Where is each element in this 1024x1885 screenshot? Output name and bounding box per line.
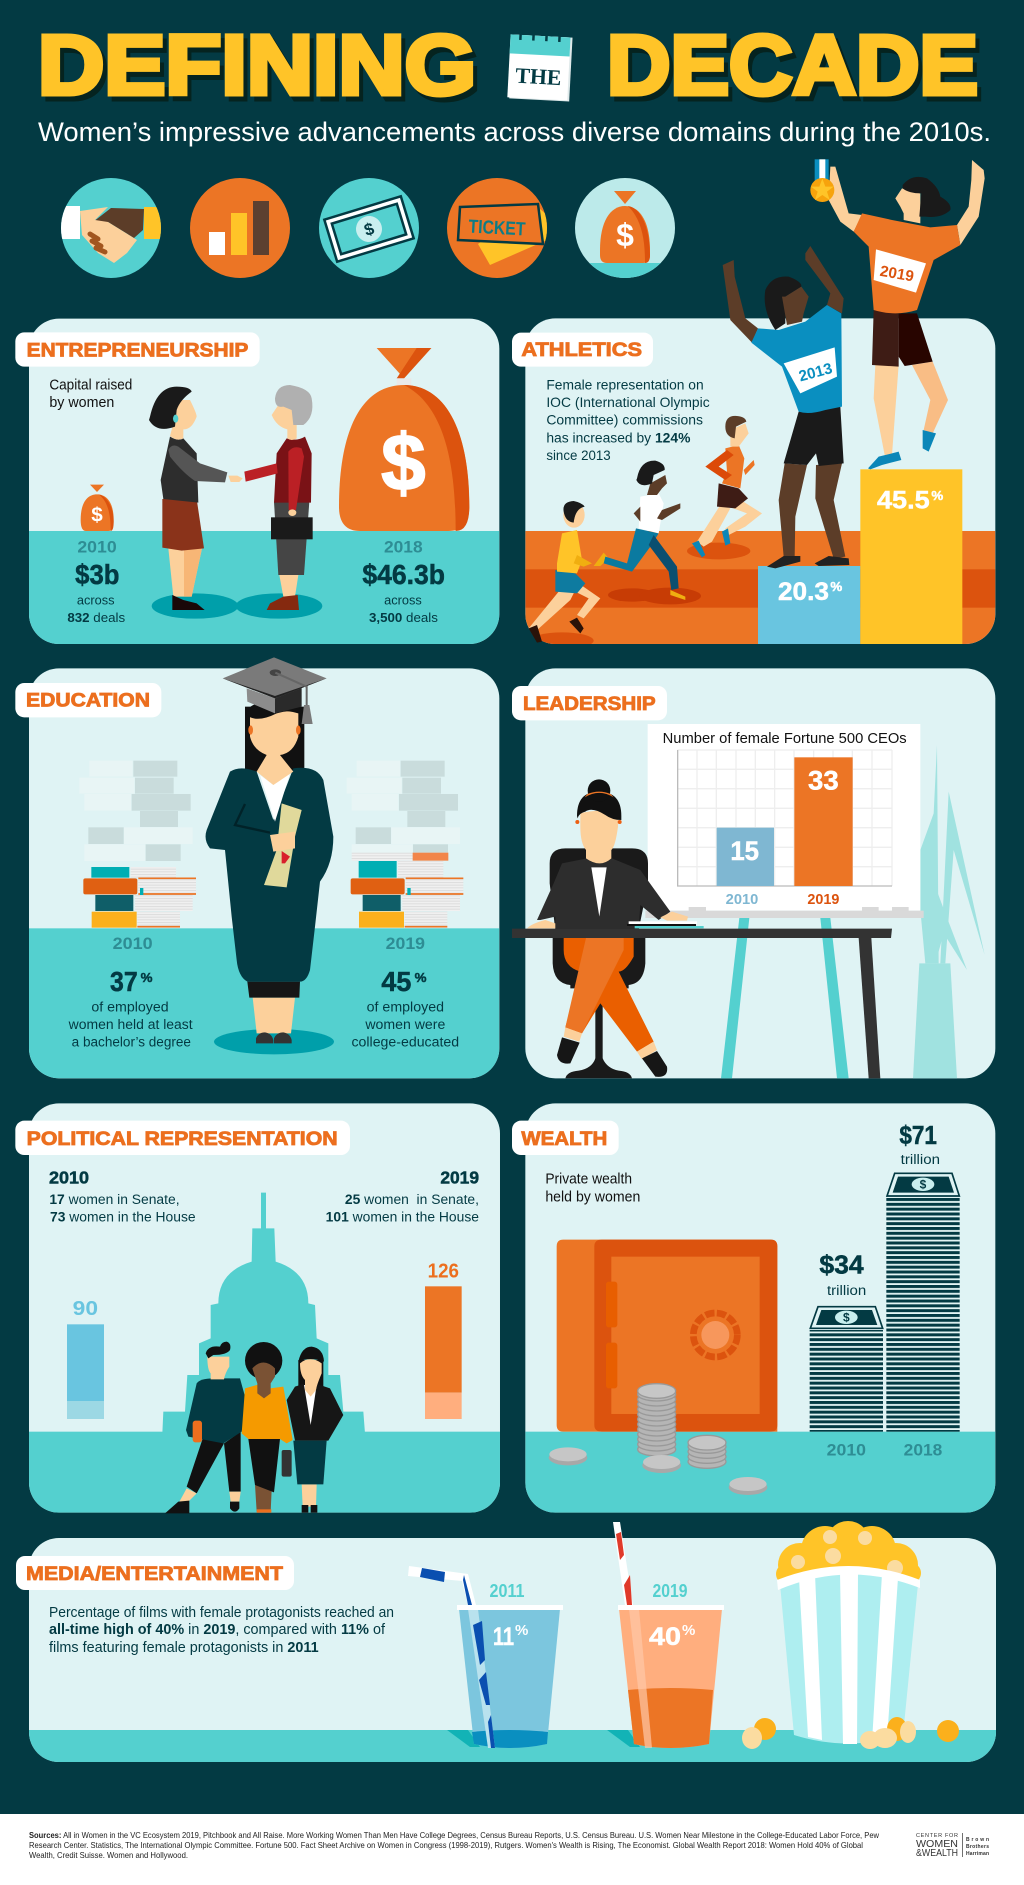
cup: 2011: % (515, 1622, 528, 1639)
stat: 45.5%: % (931, 488, 943, 503)
icon: coins (549, 1384, 767, 1495)
logo: center for women and wealth: &WEALTH (916, 1848, 958, 1859)
text: 2010 congress (49, 1167, 196, 1225)
sources text: Research Center. Statistics, The International Olympic Committee. Fortune 500. Fact Sheet Archive on Women in Congress (1998-2019), Rutgers. Women's Wealth is Rising, The Economist. Global Wealth Report 2018: Women Hold 40% of Global (29, 1840, 863, 1850)
stat: 45.5%: 45.5 (877, 487, 930, 515)
stat: 20.3%: 20.3 (778, 578, 829, 606)
stat: 2010 capital: 2010 (77, 537, 117, 556)
heading: athletics: ATHLETICS (521, 340, 642, 361)
cup: 2011: 2011 (490, 1581, 524, 1601)
panel: entrepreneurship (15, 319, 499, 644)
text: IOC representation: since 2013 (546, 447, 611, 463)
text: IOC representation: Committee) commissions (546, 412, 703, 428)
stat: 2010 education: % (141, 970, 153, 985)
text: 2010 congress: 73 women in the House (50, 1209, 196, 1225)
logo: center for women and wealth: WOMEN (916, 1839, 958, 1850)
text: capital raised (49, 377, 132, 411)
icon: small money bag (81, 485, 114, 531)
text: 2019 congress: 101 women in the House (326, 1209, 479, 1225)
logo: center for women and wealth: CENTER FOR (916, 1833, 958, 1839)
icon: calendar page with THE (507, 29, 573, 102)
heading: political representation (15, 1121, 350, 1155)
bar chart: female Fortune 500 CEOs: 2019 (807, 892, 839, 908)
figure: runner in white (594, 461, 701, 604)
text: 2010 congress: 17 women in Senate, (49, 1191, 180, 1207)
heading: wealth (512, 1121, 619, 1155)
stat: 2019 education: women were (364, 1016, 446, 1032)
icon: calendar page with THE: THE (515, 63, 562, 90)
cup: 2019 (607, 1522, 724, 1748)
stat: 2019 education: % (415, 970, 427, 985)
figure: athlete 2013 (723, 246, 849, 568)
books: 2019 stack (347, 761, 463, 928)
text: private wealth (545, 1172, 640, 1205)
bar chart: female Fortune 500 CEOs: 2010 (726, 892, 758, 908)
heading: wealth: WEALTH (521, 1129, 607, 1150)
text: film protagonists: Percentage of films with female protagonists reached an (49, 1605, 394, 1621)
figure: athlete 2013: 2013 (797, 360, 834, 385)
panel: education (15, 657, 499, 1078)
sources text (29, 1830, 880, 1860)
heading: athletics (512, 333, 653, 367)
title: DECADE (607, 18, 978, 112)
stat: 2019 education (351, 934, 459, 1050)
panel: wealth (512, 1103, 995, 1513)
stat: 2010 education: of employed (91, 998, 169, 1014)
year labels: wealth (827, 1441, 942, 1460)
text: private wealth: Private wealth (545, 1172, 632, 1188)
text: IOC representation: Female representation on (546, 376, 704, 392)
figure: two women shaking hands (149, 385, 322, 619)
bar chart: female Fortune 500 CEOs: Number of female Fortune 500 CEOs (663, 731, 907, 747)
title: DEFINING (38, 18, 476, 112)
title (38, 18, 978, 112)
subtitle: Women’s impressive advancements across diverse domains during the 2010s. (38, 117, 991, 147)
sources text: Wealth, Credit Suisse. Women and Hollywood. (29, 1850, 188, 1860)
logo: center for women and wealth (916, 1833, 989, 1859)
money stack: 2018: trillion (901, 1152, 940, 1167)
figure: runner in yellow (529, 501, 600, 643)
capitol building (162, 1193, 365, 1433)
logo: center for women and wealth: Brown (966, 1837, 989, 1843)
bar: 126 women 2019 (425, 1261, 462, 1419)
stat: 2010 capital (67, 537, 125, 625)
icon: bar chart (190, 178, 290, 278)
icon: money bag (575, 178, 675, 278)
easel legs (721, 918, 849, 1078)
money stack: 2010: $ (843, 1311, 850, 1325)
heading: education (15, 683, 161, 717)
cup: 2011: 11 (493, 1623, 514, 1651)
stat: 2018 capital: 2018 (384, 537, 423, 556)
plant (913, 745, 985, 1078)
money stack: 2018: $71 (899, 1120, 937, 1150)
sources text: Sources: All in Women in the VC Ecosystem 2019, Pitchbook and All Raise. More Working Women Than Men Have College Degrees, Census Bureau Reports, U.S. Census Bureau. U.S. Women Near Milestone in the College-Educated Labor Force, Pew (29, 1830, 880, 1840)
stat: 20.3%: % (830, 579, 842, 594)
text: film protagonists: films featuring female protagonists in 2011 (49, 1640, 319, 1656)
heading: political representation: POLITICAL REPRESENTATION (27, 1129, 338, 1150)
stat: 2019 education: 2019 (386, 934, 425, 953)
books: 2010 stack (79, 761, 196, 928)
figure: athlete 2019 with medal (810, 159, 985, 469)
money stack: 2018: $ (920, 1178, 927, 1192)
stat: 2010 education: 2010 (113, 934, 153, 953)
bar chart: female Fortune 500 CEOs: 15 (730, 836, 759, 866)
bar chart: female Fortune 500 CEOs (645, 724, 924, 918)
icon: safe (557, 1240, 777, 1432)
stat: 2010 capital: 832 deals (67, 610, 125, 625)
cup: 2019: 2019 (652, 1581, 688, 1601)
text: IOC representation (546, 376, 710, 463)
year labels: wealth: 2018 (904, 1441, 942, 1460)
icon: money bag: $ (616, 217, 634, 253)
cup: 2019: % (682, 1622, 695, 1639)
stat: 2018 capital: across (384, 592, 422, 607)
text: private wealth: held by women (545, 1189, 640, 1205)
icon: small money bag: $ (91, 503, 103, 526)
text: capital raised: by women (49, 395, 114, 411)
stat: 2018 capital: 3,500 deals (369, 610, 438, 625)
figure: three women (165, 1342, 343, 1513)
icon: ticket (447, 178, 547, 278)
stat: 2019 education: college-educated (351, 1034, 459, 1050)
panel: leadership (512, 668, 995, 1078)
popcorn kernels (742, 1717, 959, 1749)
icon: banknote: $ (362, 219, 377, 240)
figure: runner in orange (687, 416, 762, 559)
text: 2019 congress: 2019 (440, 1167, 479, 1187)
text: IOC representation: IOC (International Olympic (546, 394, 710, 410)
stat: 2010 education: 37 (110, 966, 138, 997)
icon: ticket: TICKET (468, 217, 526, 240)
bar: 90 women 2010: 90 (73, 1298, 98, 1320)
year labels: wealth: 2010 (827, 1441, 866, 1460)
heading: entrepreneurship (15, 332, 260, 367)
cup: 2019: 40 (649, 1623, 681, 1651)
money stack: 2010: trillion (827, 1283, 866, 1298)
text: 2019 congress: 25 women in Senate, (345, 1191, 479, 1207)
figure: businesswoman at desk (527, 779, 688, 1078)
cup: 2011 (408, 1566, 563, 1748)
text: capital raised: Capital raised (49, 377, 132, 393)
heading: media/entertainment: MEDIA/ENTERTAINMENT (26, 1563, 283, 1585)
stat: 2010 capital: $3b (75, 559, 119, 590)
stat: 2019 education: 45 (381, 966, 411, 997)
stat: 2010 capital: across (77, 592, 115, 607)
heading: media/entertainment (16, 1556, 294, 1590)
text: 2019 congress (326, 1167, 479, 1225)
stat: 2010 education: women held at least (68, 1016, 193, 1032)
footer band (0, 1814, 1024, 1885)
logo: center for women and wealth: Brothers (966, 1844, 989, 1850)
panel: athletics (512, 159, 995, 649)
popcorn bucket (776, 1521, 921, 1744)
icon: large money bag (339, 348, 469, 531)
figure: athlete 2019 with medal: 2019 (879, 263, 915, 285)
stat: 2018 capital: $46.3b (362, 559, 445, 590)
money stack: 2010 (810, 1249, 883, 1432)
icon: large money bag: $ (381, 418, 426, 507)
icon: handshake (61, 178, 161, 278)
stat: 2010 education (68, 934, 193, 1050)
logo: center for women and wealth: Harriman (966, 1851, 989, 1857)
bar: 126 women 2019: 126 (428, 1261, 459, 1283)
text: IOC representation: has increased by 124% (546, 429, 690, 445)
heading: leadership: LEADERSHIP (523, 694, 656, 715)
icon: banknote (319, 178, 419, 278)
bar: 90 women 2010 (67, 1298, 104, 1419)
heading: entrepreneurship: ENTREPRENEURSHIP (27, 341, 248, 362)
stat: 2019 education: of employed (367, 998, 444, 1014)
text: film protagonists (49, 1605, 394, 1656)
stat: 2010 education: a bachelor’s degree (72, 1034, 191, 1050)
stat: 2018 capital (362, 537, 445, 625)
text: 2010 congress: 2010 (49, 1167, 89, 1187)
desk (512, 921, 892, 1078)
bar chart: female Fortune 500 CEOs: 33 (808, 765, 839, 795)
figure: graduate (206, 657, 334, 1054)
money stack: 2018 (886, 1120, 960, 1432)
panel: media and entertainment (16, 1521, 996, 1762)
panel: political representation (15, 1103, 500, 1513)
heading: education: EDUCATION (26, 691, 150, 712)
running track (525, 469, 995, 649)
money stack: 2010: $34 (819, 1249, 864, 1279)
heading: leadership (512, 686, 667, 720)
text: film protagonists: all-time high of 40% in 2019, compared with 11% of (49, 1622, 386, 1638)
